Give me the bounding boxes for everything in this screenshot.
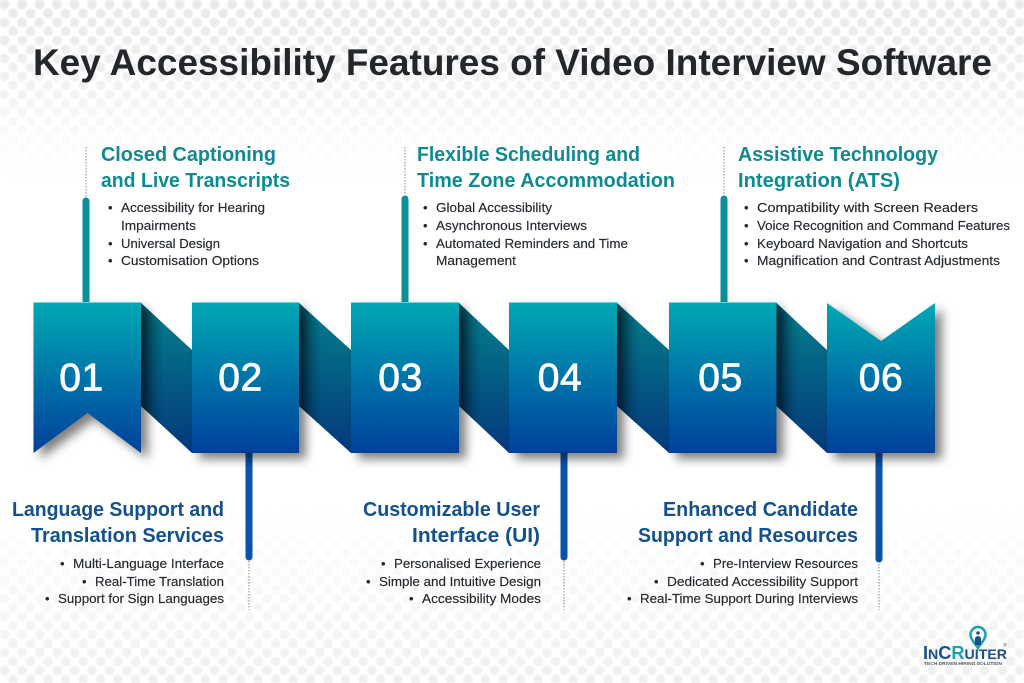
bullet list: Support for Sign Languages <box>58 591 225 606</box>
line: feature 2 connector <box>246 453 252 610</box>
line: feature 4 connector <box>560 453 568 610</box>
bullet list: • <box>744 200 749 215</box>
bullet list: • <box>108 236 113 251</box>
bullet list: Customisation Options <box>121 253 260 268</box>
line: feature 3 connector <box>402 147 408 302</box>
heading <box>363 499 540 547</box>
ribbon segment 02: 02 <box>218 356 263 400</box>
ribbon segment 06 <box>827 303 935 453</box>
bullet list: • <box>744 253 749 268</box>
bullet list <box>423 200 628 268</box>
heading: Closed Captioning <box>101 144 276 166</box>
panel: assistive technology <box>738 144 1010 268</box>
bullet list: Impairments <box>121 218 197 233</box>
ribbon segment 01: 01 <box>59 356 104 400</box>
bullet list: • <box>45 591 50 606</box>
ribbon segment 02 <box>192 302 299 453</box>
ribbon segment 03 <box>351 302 459 453</box>
bullet list: Global Accessibility <box>436 200 553 215</box>
bullet list: • <box>108 200 113 215</box>
panel: flexible scheduling <box>417 144 675 268</box>
heading: Interface (UI) <box>412 525 540 547</box>
panel: language support <box>12 499 225 606</box>
logo tagline: TECH DRIVEN HIRING SOLUTION <box>924 661 1002 666</box>
bullet list: Management <box>436 253 516 268</box>
bullet list: Asynchronous Interviews <box>436 218 588 233</box>
bullet list: Personalised Experience <box>394 556 541 571</box>
bullet list: • <box>744 218 749 233</box>
bullet list: Real-Time Translation <box>95 574 224 589</box>
bullet list: • <box>627 591 632 606</box>
bullet list: • <box>409 591 414 606</box>
panel: customizable interface <box>363 499 542 606</box>
bullet list: Accessibility for Hearing <box>121 200 265 215</box>
bullet list <box>744 200 1010 268</box>
bullet list: • <box>82 574 87 589</box>
bullet list: Simple and Intuitive Design <box>379 574 541 589</box>
bullet list <box>108 200 265 268</box>
heading: Assistive Technology <box>738 144 939 166</box>
heading <box>638 499 858 547</box>
ribbon segment 06: 06 <box>859 356 903 400</box>
bullet list <box>366 556 542 606</box>
bullet list: • <box>423 236 428 251</box>
bullet list: • <box>654 574 659 589</box>
heading: and Live Transcripts <box>101 170 290 192</box>
heading: Customizable User <box>363 499 540 521</box>
bullet list: • <box>381 556 386 571</box>
ribbon segment 03: 03 <box>378 356 423 400</box>
bullet list: Magnification and Contrast Adjustments <box>757 253 1001 268</box>
bullet list: Universal Design <box>121 236 220 251</box>
ribbon fold 2-3 <box>299 303 351 453</box>
ribbon segment 04: 04 <box>538 356 582 400</box>
logo wordmark: INCRUITER <box>923 643 1007 663</box>
bullet list: • <box>744 236 749 251</box>
heading <box>12 499 224 547</box>
bullet list: Accessibility Modes <box>422 591 542 606</box>
heading: Translation Services <box>31 525 224 547</box>
registered mark: ® <box>1003 642 1007 649</box>
bullet list: Multi-Language Interface <box>73 556 224 571</box>
bullet list: • <box>108 253 113 268</box>
ribbon segment 04 <box>509 302 617 453</box>
bullet list: Compatibility with Screen Readers <box>757 200 979 215</box>
connector lines <box>82 147 882 610</box>
heading: Flexible Scheduling and <box>417 144 640 166</box>
panel: closed captioning <box>101 144 290 268</box>
ribbon segment 05: 05 <box>698 356 743 400</box>
bullet list: • <box>366 574 371 589</box>
heading <box>738 144 939 192</box>
bullet list <box>627 556 859 606</box>
ribbon segment 05 <box>669 302 776 453</box>
heading: Time Zone Accommodation <box>417 170 675 192</box>
ribbon fold 1-2 <box>141 303 192 453</box>
bullet list: Voice Recognition and Command Features <box>757 218 1010 233</box>
bullet list: • <box>700 556 705 571</box>
line: feature 1 connector <box>82 147 90 302</box>
heading <box>101 144 290 192</box>
bullet list: • <box>60 556 65 571</box>
ribbon fold 5-6 <box>776 303 827 453</box>
ribbon <box>34 302 935 453</box>
logo <box>923 627 1007 666</box>
bullet list: Pre-Interview Resources <box>713 556 859 571</box>
ribbon segment 01 <box>34 302 141 453</box>
bullet list: Real-Time Support During Interviews <box>640 591 859 606</box>
title: Key Accessibility Features of Video Interview Software <box>33 42 992 83</box>
panel: candidate support <box>627 499 859 606</box>
bullet list: Automated Reminders and Time <box>436 236 628 251</box>
line: feature 6 connector <box>876 453 882 610</box>
heading: Enhanced Candidate <box>663 499 858 521</box>
ribbon fold 3-4 <box>459 303 509 453</box>
ribbon fold 4-5 <box>617 303 669 453</box>
icon: location pin <box>970 627 986 648</box>
line: feature 5 connector <box>720 147 728 302</box>
heading: Integration (ATS) <box>738 170 900 192</box>
heading <box>417 144 675 192</box>
heading: Support and Resources <box>638 525 858 547</box>
heading: Language Support and <box>12 499 224 521</box>
bullet list <box>45 556 225 606</box>
bullet list: • <box>423 218 428 233</box>
bullet list: Dedicated Accessibility Support <box>667 574 858 589</box>
bullet list: • <box>423 200 428 215</box>
bullet list: Keyboard Navigation and Shortcuts <box>757 236 969 251</box>
